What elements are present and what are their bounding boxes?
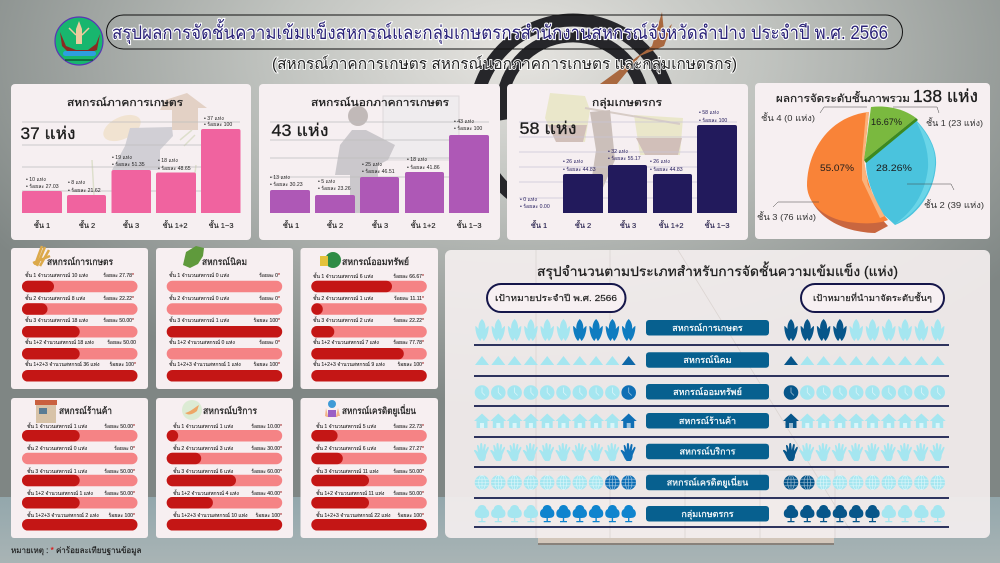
- rows: ร้อยละ 60.00*: [251, 468, 282, 475]
- rows: ร้อยละ 50.00*: [104, 423, 135, 430]
- axis labels: ชั้น 1+2: [658, 220, 684, 230]
- axis labels: [283, 220, 482, 230]
- row: farmer groups: [475, 505, 945, 522]
- value labels: [520, 110, 727, 210]
- illustration: farmer carrying baskets: [545, 93, 683, 190]
- heading: สหกรณ์เครดิตยูเนี่ยน: [342, 404, 416, 417]
- row: farmer groups: กลุ่มเกษตรกร: [681, 509, 734, 520]
- value labels: • ร้อยละ 27.03: [26, 183, 59, 190]
- illustration: farmer: [92, 93, 207, 213]
- value labels: • ร้อยละ 100: [454, 125, 482, 132]
- rows: ชั้น 3 จำนวนสหกรณ์ 1 แห่ง: [169, 316, 230, 324]
- row: shops: [474, 413, 946, 428]
- rows: ชั้น 1+2+3 จำนวนสหกรณ์ 36 แห่ง: [25, 360, 100, 368]
- value labels: • ร้อยละ 48.65: [158, 165, 191, 172]
- rows: ร้อยละ 0*: [259, 295, 280, 302]
- axis labels: ชั้น 1−3: [208, 220, 234, 230]
- row: agriculture: สหกรณ์การเกษตร: [672, 322, 743, 333]
- rows: ชั้น 1 จำนวนสหกรณ์ 1 แห่ง: [27, 422, 88, 430]
- row: services: [474, 443, 944, 461]
- rows: ร้อยละ 11.11*: [394, 295, 424, 302]
- value labels: • ร้อยละ 23.26: [318, 185, 351, 192]
- slice labels: ชั้น 3 (76 แห่ง): [757, 211, 816, 222]
- value labels: • ร้อยละ 44.83: [563, 166, 596, 173]
- icon: shop: [35, 400, 57, 423]
- rows: [22, 422, 138, 530]
- icon: hands with globe: [325, 400, 340, 417]
- row: credit union: [475, 475, 945, 490]
- rows: ชั้น 1+2 จำนวนสหกรณ์ 7 แห่ง: [313, 338, 379, 346]
- axis labels: ชั้น 1−3: [456, 220, 482, 230]
- value labels: • ร้อยละ 44.83: [650, 166, 683, 173]
- axis labels: [34, 220, 234, 230]
- rows: ชั้น 1+2 จำนวนสหกรณ์ 1 แห่ง: [27, 489, 93, 497]
- row: settlement: สหกรณ์นิคม: [683, 354, 732, 365]
- rows: ร้อยละ 77.78*: [393, 339, 424, 346]
- rows: ร้อยละ 66.67*: [393, 273, 424, 280]
- pill: annual target: [487, 284, 626, 312]
- value labels: • 18 แห่ง: [407, 157, 427, 163]
- illustration: businessman: [335, 96, 459, 213]
- panel: agricultural cooperatives: [11, 84, 251, 240]
- bar chart: [270, 135, 489, 213]
- rows: ร้อยละ 100*: [253, 317, 280, 324]
- rows: ชั้น 1 จำนวนสหกรณ์ 5 แห่ง: [316, 422, 377, 430]
- rows: ร้อยละ 0*: [114, 445, 135, 452]
- heading: ผลการจัดระดับชั้นภาพรวม: [776, 91, 910, 105]
- value labels: • ร้อยละ 100: [699, 117, 727, 124]
- rows: ชั้น 1 จำนวนสหกรณ์ 0 แห่ง: [169, 271, 230, 279]
- rows: ร้อยละ 0*: [259, 272, 280, 279]
- title: [106, 15, 902, 49]
- rows: ชั้น 1 จำนวนสหกรณ์ 1 แห่ง: [173, 422, 234, 430]
- rows: ชั้น 3 จำนวนสหกรณ์ 1 แห่ง: [27, 467, 88, 475]
- rows: [22, 271, 138, 382]
- rows: ร้อยละ 22.73*: [393, 423, 424, 430]
- rows: ชั้น 1+2+3 จำนวนสหกรณ์ 9 แห่ง: [313, 360, 385, 368]
- total: 138 แห่ง: [913, 86, 978, 106]
- panel: non-agricultural cooperatives: [259, 84, 500, 240]
- axis labels: ชั้น 1−3: [704, 220, 730, 230]
- rows: ร้อยละ 50.00*: [393, 468, 424, 475]
- card: credit union: [300, 398, 438, 538]
- rows: ชั้น 1+2 จำนวนสหกรณ์ 0 แห่ง: [169, 338, 235, 346]
- total: 58 แห่ง: [520, 119, 576, 138]
- slice labels: ชั้น 2 (39 แห่ง): [924, 199, 984, 210]
- rows: ร้อยละ 100*: [108, 512, 135, 519]
- rows: ชั้น 1+2 จำนวนสหกรณ์ 4 แห่ง: [173, 489, 239, 497]
- row: settlement: [475, 352, 945, 368]
- heading: สรุปจำนวนตามประเภทสำหรับการจัดชั้นความเข้มแข็ง (แห่ง): [537, 261, 898, 280]
- icon: settlement map: [183, 246, 204, 268]
- subtitle: (สหกรณ์ภาคการเกษตร สหกรณ์นอกภาคการเกษตร และกลุ่มเกษตรกร): [272, 55, 737, 74]
- rows: ชั้น 3 จำนวนสหกรณ์ 18 แห่ง: [25, 316, 88, 324]
- rows: ชั้น 1+2+3 จำนวนสหกรณ์ 22 แห่ง: [316, 511, 391, 519]
- value labels: • ร้อยละ 21.62: [68, 187, 101, 194]
- bar chart: [22, 129, 240, 213]
- axis labels: ชั้น 1+2: [162, 220, 188, 230]
- value labels: • 5 แห่ง: [318, 179, 335, 185]
- value labels: • 58 แห่ง: [699, 110, 719, 116]
- panel: overall pie: [755, 83, 990, 239]
- rows: ร้อยละ 100*: [109, 361, 136, 368]
- icon: service hands: [182, 400, 202, 420]
- axis labels: ชั้น 3: [372, 220, 388, 230]
- axis labels: ชั้น 2: [575, 220, 591, 230]
- rows: ร้อยละ 100*: [397, 512, 424, 519]
- rows: ร้อยละ 22.22*: [393, 317, 424, 324]
- slice labels: ชั้น 1 (23 แห่ง): [926, 117, 983, 128]
- card: agriculture: [11, 246, 148, 389]
- value labels: 16.67%: [871, 117, 902, 127]
- pie chart: 55.07%: [820, 163, 854, 173]
- value labels: [270, 119, 482, 192]
- value labels: • 10 แห่ง: [26, 177, 46, 183]
- value labels: • ร้อยละ 51.35: [112, 161, 145, 168]
- footnote: หมายเหตุ : * ค่าร้อยละเทียบฐานข้อมูล: [11, 546, 141, 556]
- rows: ชั้น 2 จำนวนสหกรณ์ 0 แห่ง: [169, 294, 230, 302]
- rows: ชั้น 3 จำนวนสหกรณ์ 2 แห่ง: [313, 316, 374, 324]
- total: 43 แห่ง: [272, 121, 328, 140]
- rows: ชั้น 2 จำนวนสหกรณ์ 1 แห่ง: [313, 294, 374, 302]
- rows: ร้อยละ 100*: [253, 361, 280, 368]
- dividers: [474, 345, 949, 527]
- row: savings: [475, 384, 945, 400]
- value labels: • ร้อยละ 41.86: [407, 164, 440, 171]
- rows: [167, 422, 282, 530]
- rows: [311, 422, 427, 530]
- heading: สหกรณ์ออมทรัพย์: [342, 256, 409, 268]
- card: settlement: [156, 246, 293, 389]
- slice labels: [757, 112, 984, 222]
- pill: annual target: เป้าหมายประจำปี พ.ศ. 2566: [495, 293, 617, 303]
- rows: ร้อยละ 100*: [397, 361, 424, 368]
- axis labels: [531, 220, 730, 230]
- axis labels: ชั้น 2: [327, 220, 343, 230]
- rows: ชั้น 1 จำนวนสหกรณ์ 6 แห่ง: [313, 272, 374, 280]
- card: savings: [300, 248, 438, 389]
- value labels: • ร้อยละ 55.17: [608, 155, 641, 162]
- axis labels: ชั้น 3: [123, 220, 139, 230]
- value labels: [26, 116, 232, 194]
- heading: สหกรณ์บริการ: [203, 405, 257, 417]
- axis labels: ชั้น 1: [531, 220, 547, 230]
- row: savings: สหกรณ์ออมทรัพย์: [673, 386, 742, 397]
- rows: ร้อยละ 50.00*: [103, 317, 134, 324]
- rows: ชั้น 1 จำนวนสหกรณ์ 10 แห่ง: [25, 271, 88, 279]
- heading: สหกรณ์การเกษตร: [47, 256, 113, 268]
- heading: สหกรณ์นอกภาคการเกษตร: [311, 96, 449, 109]
- rows: ชั้น 1+2+3 จำนวนสหกรณ์ 2 แห่ง: [27, 511, 99, 519]
- value labels: • 8 แห่ง: [68, 180, 85, 186]
- icon: money bag: [320, 252, 341, 268]
- leader lines: [773, 107, 954, 207]
- value labels: • 43 แห่ง: [454, 119, 474, 125]
- rows: ร้อยละ 0*: [259, 339, 280, 346]
- rows: ชั้น 3 จำนวนสหกรณ์ 6 แห่ง: [173, 467, 234, 475]
- card: services: [156, 398, 293, 538]
- title: สรุปผลการจัดชั้นความเข้มแข็งสหกรณ์และกลุ่มเกษตรกรสำนักงานสหกรณ์จังหวัดลำปาง ประจำปี พ.ศ. 2566: [112, 19, 888, 45]
- rows: ร้อยละ 30.00*: [251, 445, 282, 452]
- rows: ชั้น 3 จำนวนสหกรณ์ 11 แห่ง: [316, 467, 379, 475]
- rows: [167, 271, 282, 382]
- rows: ชั้น 1+2 จำนวนสหกรณ์ 18 แห่ง: [25, 338, 94, 346]
- value labels: • ร้อยละ 46.51: [362, 168, 395, 175]
- axis labels: ชั้น 2: [79, 220, 95, 230]
- rows: ร้อยละ 10.00*: [251, 423, 282, 430]
- rows: ร้อยละ 27.78*: [103, 272, 134, 279]
- bar chart: [563, 125, 737, 213]
- value labels: • ร้อยละ 30.23: [270, 181, 303, 188]
- rows: ชั้น 2 จำนวนสหกรณ์ 3 แห่ง: [173, 444, 234, 452]
- heading: สหกรณ์นิคม: [202, 256, 247, 268]
- panel: summary by type: [445, 250, 990, 538]
- row: credit union: สหกรณ์เครดิตยูเนี่ยน: [667, 476, 748, 489]
- pie chart: [807, 107, 936, 233]
- card: shops: [11, 398, 148, 538]
- value labels: • ร้อยละ 100: [204, 121, 232, 128]
- rows: [311, 272, 427, 382]
- value labels: • 18 แห่ง: [158, 158, 178, 164]
- axis labels: ชั้น 3: [620, 220, 636, 230]
- heading: กลุ่มเกษตรกร: [592, 97, 662, 109]
- rows: ร้อยละ 27.27*: [393, 445, 424, 452]
- value labels: • 26 แห่ง: [563, 159, 583, 165]
- rows: ชั้น 2 จำนวนสหกรณ์ 8 แห่ง: [25, 294, 86, 302]
- slice labels: ชั้น 4 (0 แห่ง): [761, 112, 815, 123]
- rows: ร้อยละ 50.00*: [104, 490, 135, 497]
- value labels: • 37 แห่ง: [204, 116, 224, 122]
- row: services: สหกรณ์บริการ: [680, 446, 736, 457]
- rows: ชั้น 1+2 จำนวนสหกรณ์ 11 แห่ง: [316, 489, 385, 497]
- icon: wheat: [33, 246, 50, 266]
- axis labels: ชั้น 1: [283, 220, 299, 230]
- rows: ชั้น 1+2+3 จำนวนสหกรณ์ 1 แห่ง: [169, 360, 241, 368]
- value labels: • 25 แห่ง: [362, 162, 382, 168]
- value labels: • ร้อยละ 0.00: [520, 203, 550, 210]
- rows: ร้อยละ 50.00: [107, 339, 136, 346]
- rows: ร้อยละ 50.00*: [104, 468, 135, 475]
- heading: สหกรณ์ภาคการเกษตร: [67, 96, 183, 109]
- rows: ร้อยละ 22.22*: [103, 295, 134, 302]
- rows: ร้อยละ 100*: [255, 512, 282, 519]
- value labels: • 26 แห่ง: [650, 159, 670, 165]
- value labels: • 0 แห่ง: [520, 197, 537, 203]
- rows: ชั้น 2 จำนวนสหกรณ์ 6 แห่ง: [316, 444, 377, 452]
- panel: farmer groups: [507, 84, 748, 240]
- row: agriculture: [475, 319, 944, 341]
- rows: ชั้น 2 จำนวนสหกรณ์ 0 แห่ง: [27, 444, 88, 452]
- pill: classified target: เป้าหมายที่นำมาจัดระดับชั้นๆ: [813, 292, 932, 303]
- axis labels: ชั้น 1: [34, 220, 50, 230]
- axis labels: ชั้น 1+2: [410, 220, 436, 230]
- value labels: • 32 แห่ง: [608, 149, 628, 155]
- emblem: [55, 17, 103, 65]
- row: shops: สหกรณ์ร้านค้า: [679, 415, 736, 426]
- value labels: • 13 แห่ง: [270, 175, 290, 181]
- rows: ร้อยละ 50.00*: [393, 490, 424, 497]
- rows: ชั้น 1+2+3 จำนวนสหกรณ์ 10 แห่ง: [173, 511, 248, 519]
- value labels: • 19 แห่ง: [112, 155, 132, 161]
- heading: สหกรณ์ร้านค้า: [59, 405, 112, 417]
- rows: ร้อยละ 40.00*: [251, 490, 282, 497]
- pill: classified target: [801, 284, 944, 312]
- total: 37 แห่ง: [20, 124, 76, 143]
- pie chart: 28.26%: [876, 163, 912, 173]
